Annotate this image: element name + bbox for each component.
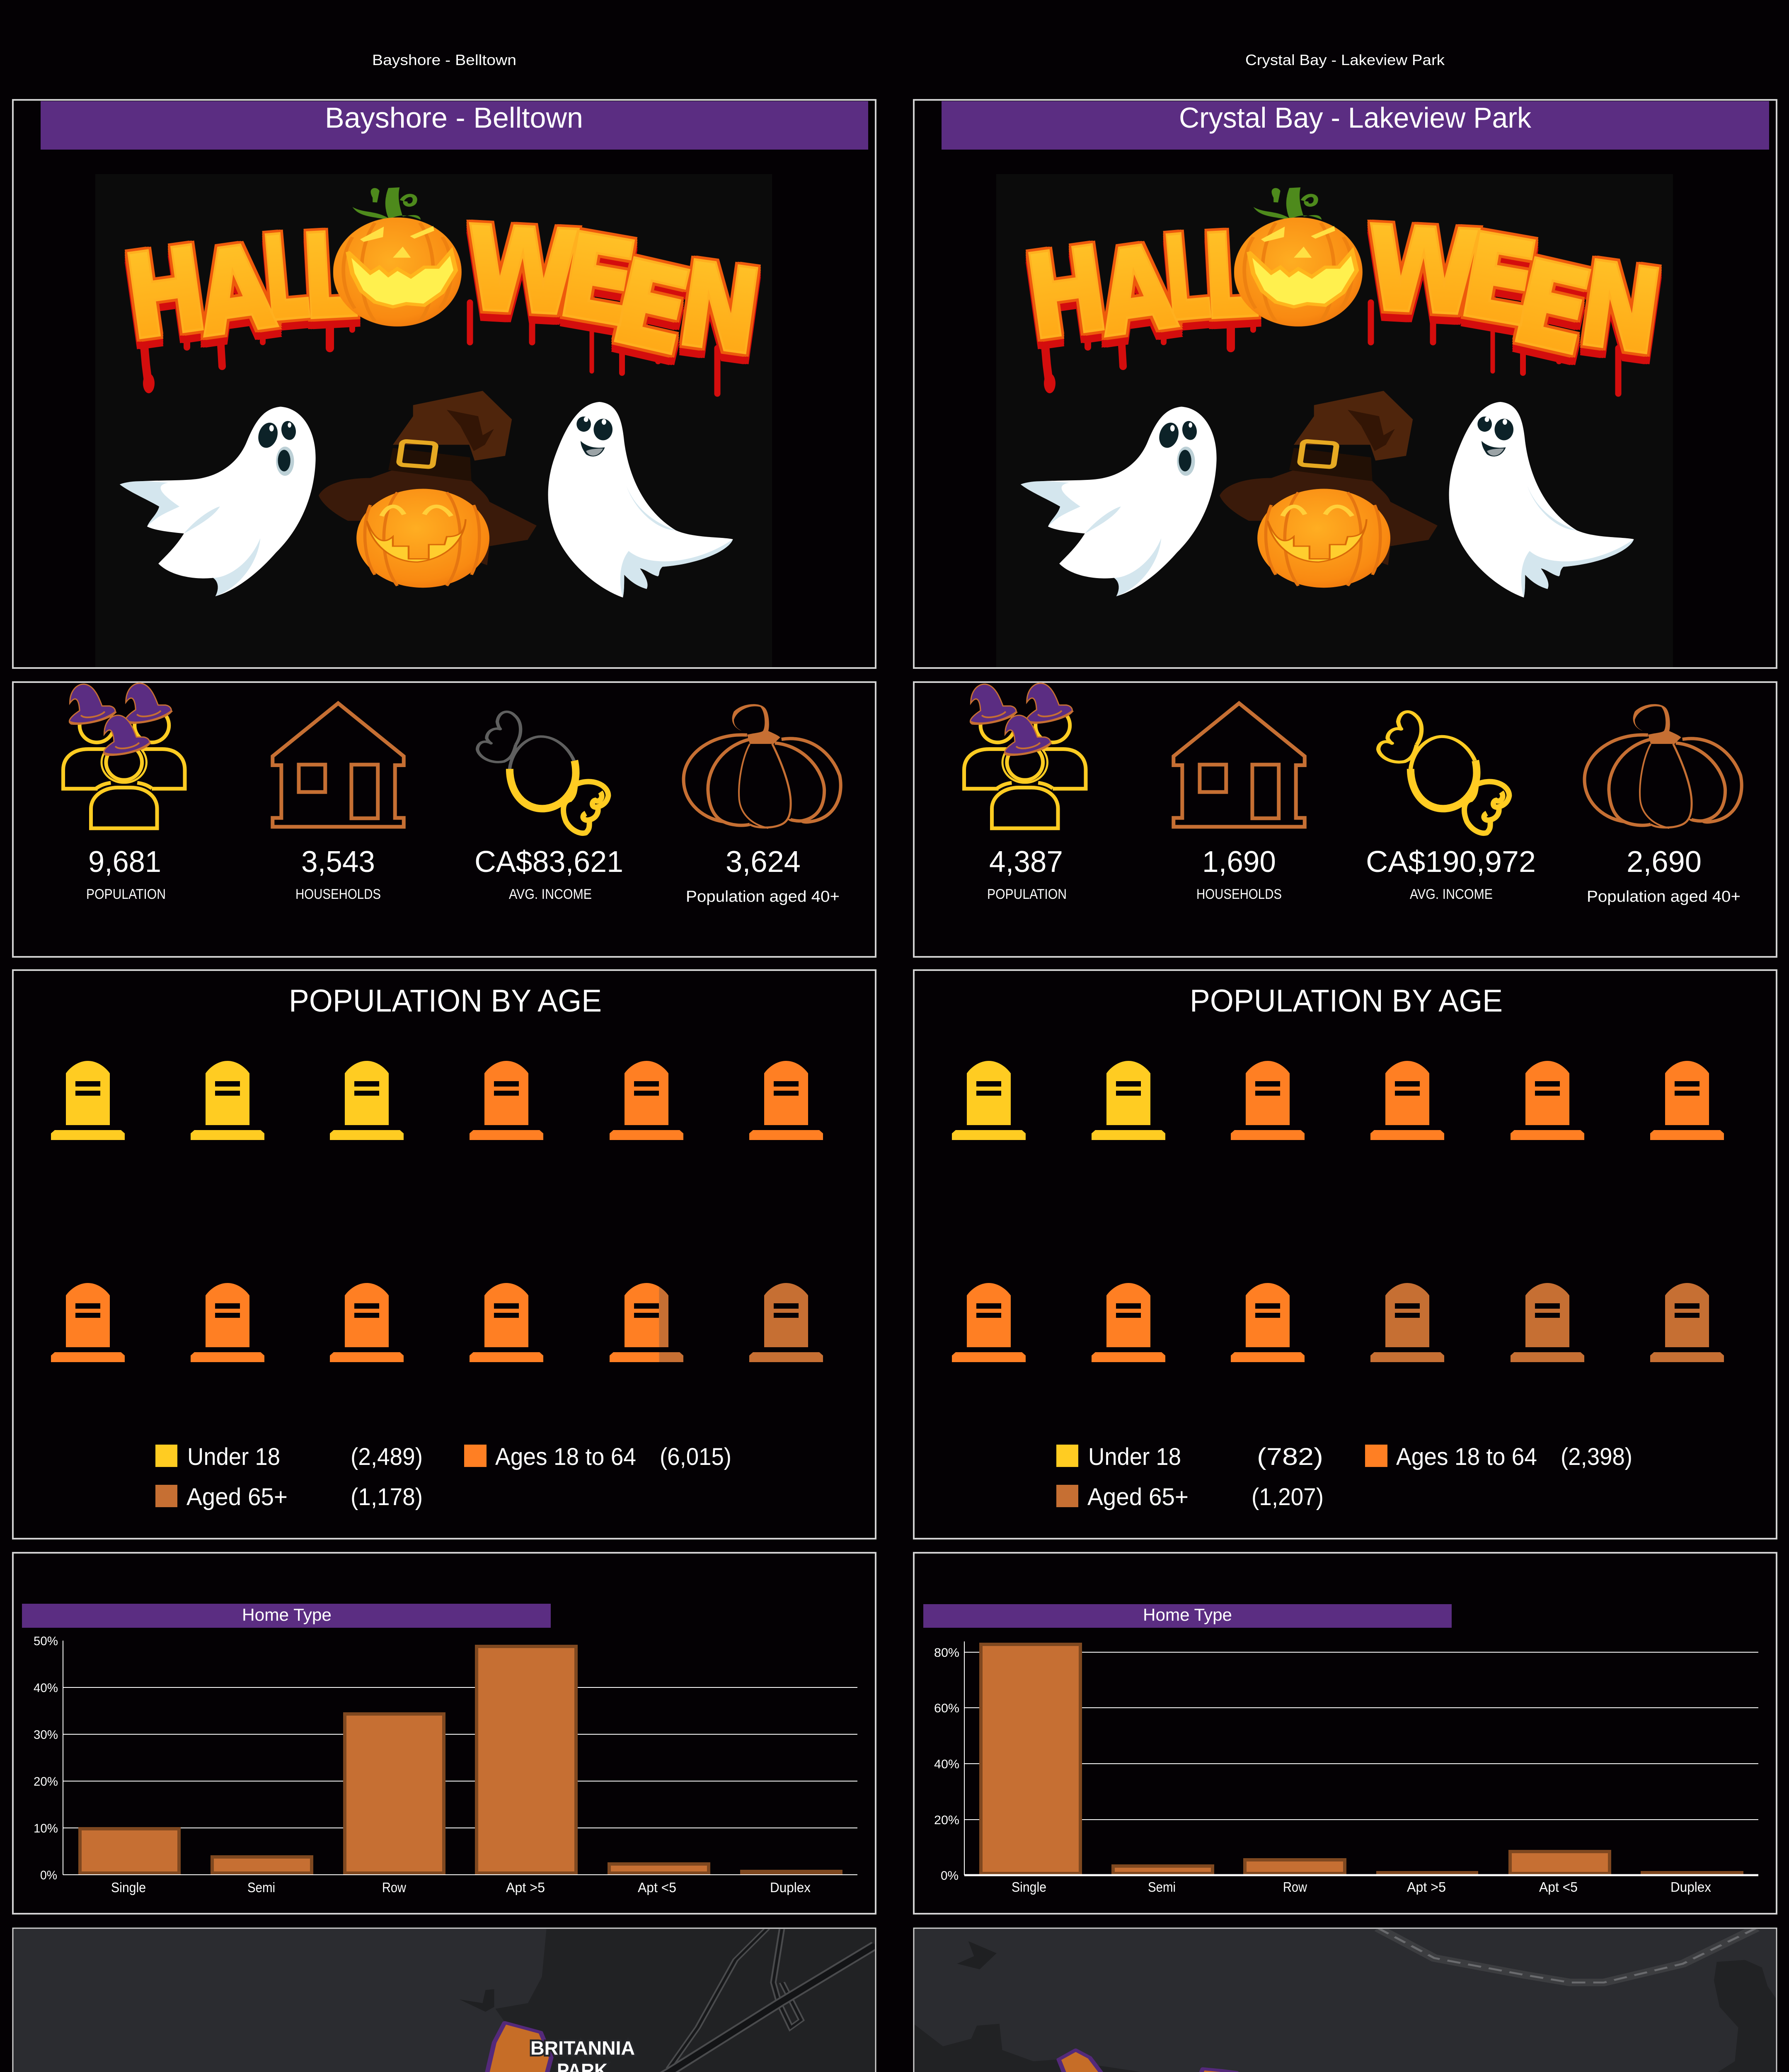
map label: Britannia: BRITANNIA xyxy=(530,2037,635,2059)
artwork word: E xyxy=(1452,208,1546,352)
artwork word xyxy=(118,202,767,380)
header bar xyxy=(942,101,1769,150)
artwork word xyxy=(1019,202,1668,380)
bar chart: 40% xyxy=(34,1681,58,1695)
chart heading bar xyxy=(923,1604,1452,1628)
artwork word: W xyxy=(1364,202,1482,341)
bar chart: 50% xyxy=(34,1634,58,1648)
artwork pumpkin letter xyxy=(1234,187,1363,327)
stat label: population: POPULATION xyxy=(86,886,166,902)
legend: Aged 65+ xyxy=(186,1484,288,1510)
chart heading bar xyxy=(22,1604,551,1628)
artwork background xyxy=(996,174,1673,667)
icon: pumpkin xyxy=(684,704,841,828)
tombstone pictogram xyxy=(51,1061,823,1362)
artwork word: L xyxy=(299,209,360,344)
stat label: households: HOUSEHOLDS xyxy=(1196,886,1282,902)
bar chart: Apt >5 xyxy=(1407,1879,1446,1895)
panel: right home type chart xyxy=(914,1553,1777,1914)
legend: Ages 18 to 64 xyxy=(1396,1443,1537,1470)
icon: people with witch hats xyxy=(964,683,1086,828)
panel: left map xyxy=(13,1928,881,2072)
panel: left header and Halloween artwork xyxy=(13,100,876,668)
artwork word: W xyxy=(463,202,581,341)
panel: left population by age xyxy=(13,970,876,1539)
heading: POPULATION BY AGE xyxy=(1190,983,1503,1019)
bar chart: Semi xyxy=(247,1880,275,1895)
icon: house xyxy=(273,703,404,827)
map area polygon xyxy=(485,2021,554,2072)
stat: households: 3,543 xyxy=(301,845,375,879)
bar chart: 30% xyxy=(34,1728,58,1742)
legend xyxy=(1056,1443,1632,1510)
legend: (2,489) xyxy=(351,1443,423,1470)
bar chart: Row xyxy=(1283,1879,1307,1895)
header bar xyxy=(41,101,868,150)
bar chart: Single xyxy=(111,1880,146,1895)
artwork ghosts, drips and witch pumpkin xyxy=(120,303,733,598)
bar chart: 0% xyxy=(941,1869,959,1883)
bar chart: Apt <5 xyxy=(1539,1879,1578,1895)
artwork ghosts, drips and witch pumpkin xyxy=(1021,303,1634,598)
bar chart: 10% xyxy=(34,1822,58,1835)
stat label: aged 40+: Population aged 40+ xyxy=(1587,888,1741,905)
bar chart: 80% xyxy=(934,1646,959,1660)
panel: left key stats xyxy=(13,682,876,957)
chart heading: Home Type xyxy=(242,1605,332,1624)
artwork word: H xyxy=(118,223,214,365)
map area polygon xyxy=(1059,2050,1632,2072)
artwork word: H xyxy=(1019,223,1115,365)
bar chart: 20% xyxy=(934,1813,959,1827)
stat label: income: AVG. INCOME xyxy=(1410,886,1493,902)
legend: Under 18 xyxy=(1088,1443,1181,1470)
bar chart xyxy=(934,1641,1758,1895)
legend: Aged 65+ xyxy=(1087,1484,1189,1510)
bar chart: Single xyxy=(1012,1879,1046,1895)
bar chart: Duplex xyxy=(770,1880,811,1895)
artwork word: N xyxy=(1573,238,1668,380)
header title: Crystal Bay - Lakeview Park xyxy=(1179,102,1532,134)
page caption: right: Crystal Bay - Lakeview Park xyxy=(1245,51,1445,68)
stat: population: 4,387 xyxy=(989,845,1063,879)
legend: (1,178) xyxy=(351,1484,423,1510)
artwork pumpkin letter xyxy=(333,187,462,327)
artwork word: L xyxy=(1200,209,1261,344)
legend: (2,398) xyxy=(1561,1443,1632,1470)
stat: income: CA$190,972 xyxy=(1366,845,1536,879)
bar chart: Apt <5 xyxy=(638,1880,676,1895)
bar chart: Apt >5 xyxy=(506,1880,545,1895)
artwork word: E xyxy=(551,208,645,352)
heading: POPULATION BY AGE xyxy=(289,983,602,1019)
panel: left home type chart xyxy=(13,1553,876,1914)
icon: house xyxy=(1174,703,1305,827)
stat label: population: POPULATION xyxy=(987,886,1067,902)
artwork word: E xyxy=(1502,235,1603,380)
legend: (1,207) xyxy=(1252,1484,1324,1510)
artwork word: E xyxy=(601,235,702,380)
panel: right header and Halloween artwork xyxy=(914,100,1777,668)
legend: (782) xyxy=(1257,1443,1323,1470)
bar chart: Semi xyxy=(1148,1879,1176,1895)
artwork word: A xyxy=(1092,220,1181,362)
stat: aged 40+: 3,624 xyxy=(726,845,801,879)
stat label: households: HOUSEHOLDS xyxy=(295,886,381,902)
icon: people with witch hats xyxy=(63,683,185,828)
stat label: income: AVG. INCOME xyxy=(509,886,592,902)
panel: right map xyxy=(908,1928,1777,2072)
panel: right population by age xyxy=(914,970,1777,1539)
bar chart: 60% xyxy=(934,1702,959,1715)
stat: income: CA$83,621 xyxy=(474,845,623,879)
legend: Under 18 xyxy=(187,1443,280,1470)
stat label: aged 40+: Population aged 40+ xyxy=(686,888,840,905)
bar chart: Duplex xyxy=(1670,1879,1711,1895)
icon: pumpkin xyxy=(1585,704,1742,828)
chart heading: Home Type xyxy=(1143,1605,1232,1624)
legend xyxy=(155,1443,731,1510)
artwork background xyxy=(95,174,772,667)
header title: Bayshore - Belltown xyxy=(325,102,583,134)
artwork word: L xyxy=(258,211,313,346)
legend: (6,015) xyxy=(660,1443,731,1470)
stat: households: 1,690 xyxy=(1202,845,1276,879)
bar chart: 20% xyxy=(34,1775,58,1789)
bar chart: Row xyxy=(382,1880,406,1895)
artwork word: A xyxy=(191,220,281,362)
stat: aged 40+: 2,690 xyxy=(1627,845,1702,879)
icon: candy xyxy=(477,712,608,833)
icon: candy xyxy=(1378,712,1509,833)
tombstone pictogram xyxy=(952,1061,1724,1362)
bar chart: 0% xyxy=(40,1869,57,1882)
stat: population: 9,681 xyxy=(88,845,161,879)
panel: right key stats xyxy=(914,682,1777,957)
page caption: left: Bayshore - Belltown xyxy=(372,51,516,68)
artwork word: L xyxy=(1159,211,1214,346)
bar chart xyxy=(34,1634,857,1895)
artwork word: N xyxy=(672,238,767,380)
bar chart: 40% xyxy=(934,1757,959,1771)
legend: Ages 18 to 64 xyxy=(495,1443,636,1470)
